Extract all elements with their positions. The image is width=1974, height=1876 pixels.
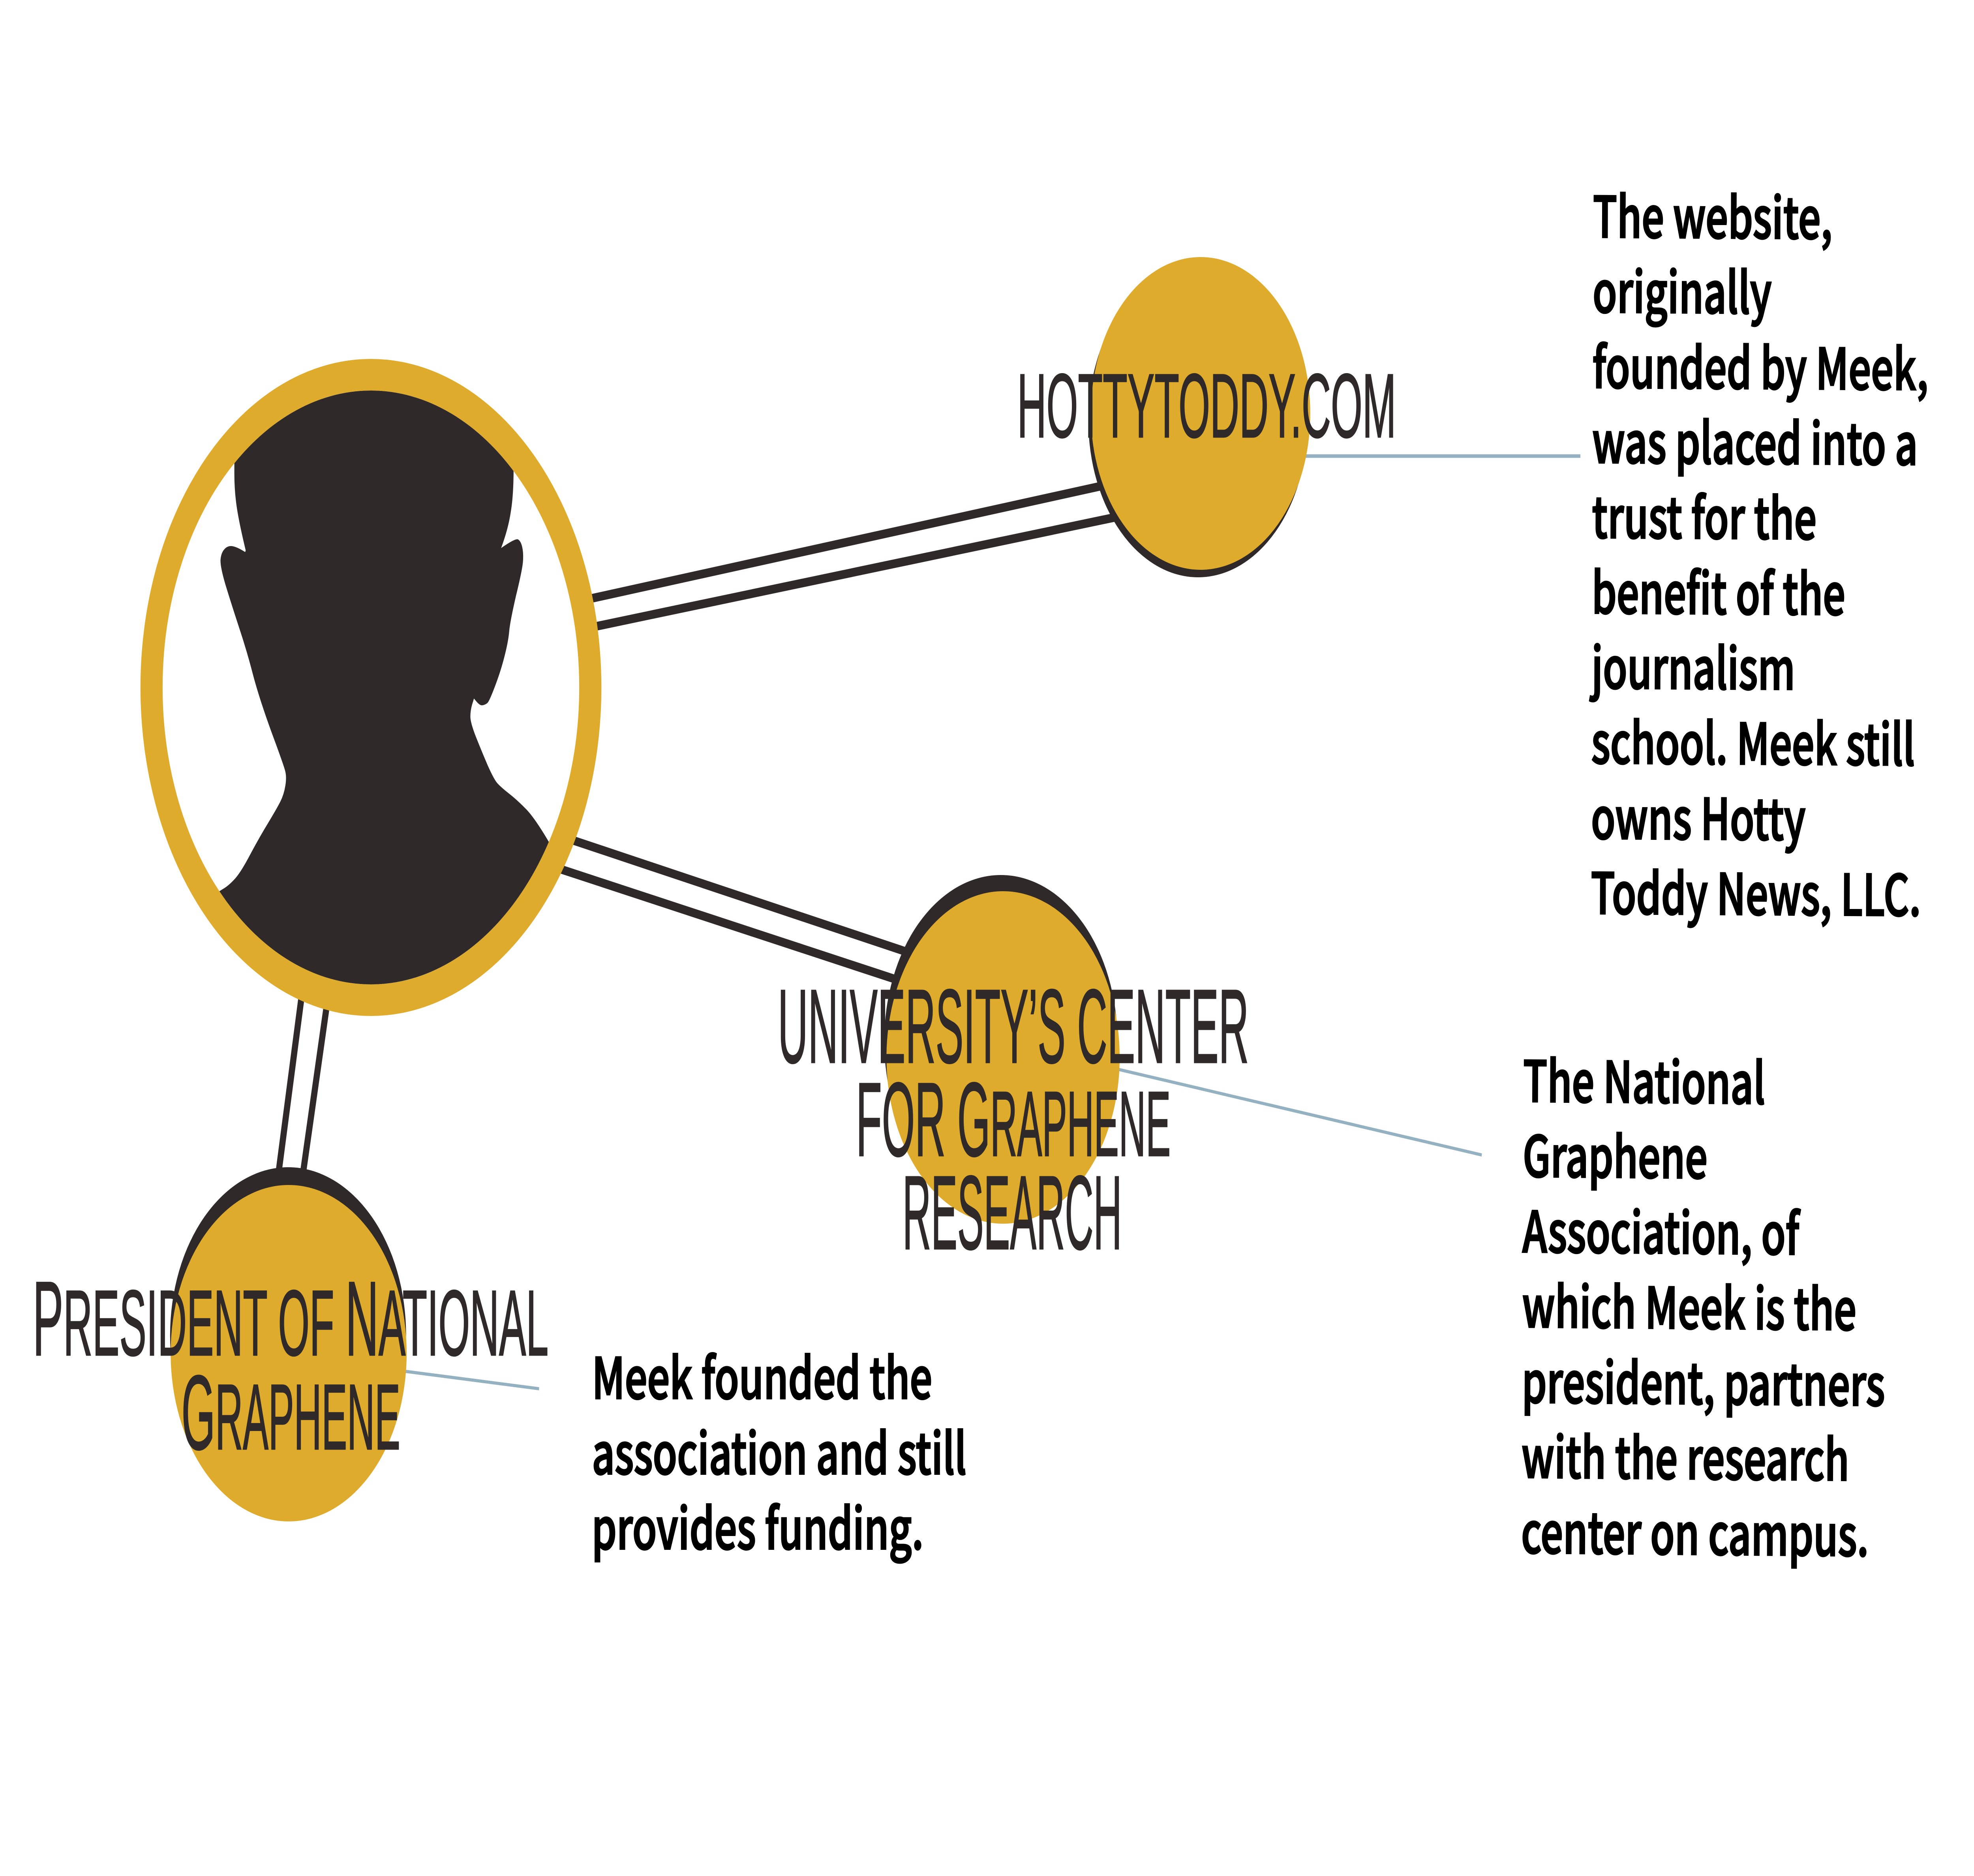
heading: University's Center for Graphene Research [778, 967, 1249, 1271]
callout: website: trust for the [1592, 472, 1817, 556]
leader line: HottyToddy.com callout [1297, 454, 1580, 458]
leader line: University's Center callout [1108, 1067, 1482, 1155]
callout: National Graphene Association: which Meek is the [1522, 1262, 1857, 1346]
heading: HottyToddy.com: HOTTYTODDY.COM [1017, 355, 1396, 457]
heading: President of National Graphene: GRAPHENE [182, 1354, 400, 1472]
callout: National Graphene Association: with the research [1521, 1412, 1849, 1497]
node: President of National Graphene [33, 1167, 548, 1521]
callout: website: benefit of the [1591, 548, 1845, 631]
callout: website: school. Meek still [1591, 698, 1915, 782]
infographic canvas [36, 192, 1927, 1569]
heading: President of National Graphene [33, 1260, 548, 1472]
ring [152, 375, 590, 1000]
callout: founding: Meek founded the [592, 1333, 932, 1415]
heading: President of National Graphene: PRESIDENT OF NATIONAL [33, 1260, 548, 1378]
callout: website: Toddy News, LLC. [1591, 848, 1921, 932]
connector: portrait to President of National Graphene [277, 983, 329, 1185]
callout: founding [592, 1333, 966, 1566]
callout: National Graphene Association: Association, of [1522, 1187, 1801, 1271]
callout: website: journalism [1589, 623, 1795, 706]
connector: portrait to HottyToddy.com [582, 483, 1125, 628]
callout: website: The website, [1593, 172, 1833, 255]
callout: National Graphene Association: Graphene [1523, 1111, 1708, 1195]
callout: National Graphene Association [1521, 1036, 1886, 1573]
callout: website: was placed into a [1592, 397, 1918, 481]
connector: portrait to University's Center [548, 834, 914, 984]
heading: University's Center for Graphene Research: FOR GRAPHENE [856, 1061, 1171, 1178]
callout: founding: provides funding. [592, 1484, 923, 1566]
callout: National Graphene Association: center on campus. [1521, 1487, 1869, 1572]
callout: website: originally [1593, 247, 1772, 330]
callout: website: owns Hotty [1591, 773, 1806, 856]
callout: website: founded by Meek, [1592, 322, 1929, 406]
heading: University's Center for Graphene Research: UNIVERSITY’S CENTER [778, 967, 1249, 1085]
portrait: silhouette in gold ring [152, 355, 590, 1027]
node: HottyToddy.com [1017, 257, 1396, 577]
callout: National Graphene Association: president, partners [1522, 1337, 1885, 1422]
icon: head silhouette [220, 391, 549, 984]
leader line: President callout [393, 1370, 539, 1389]
callout: founding: association and still [592, 1408, 966, 1491]
callout: National Graphene Association: The National [1523, 1036, 1766, 1120]
node: University's Center for Graphene Research [778, 875, 1249, 1271]
heading: University's Center for Graphene Research: RESEARCH [903, 1154, 1122, 1271]
callout: website [1589, 172, 1929, 932]
